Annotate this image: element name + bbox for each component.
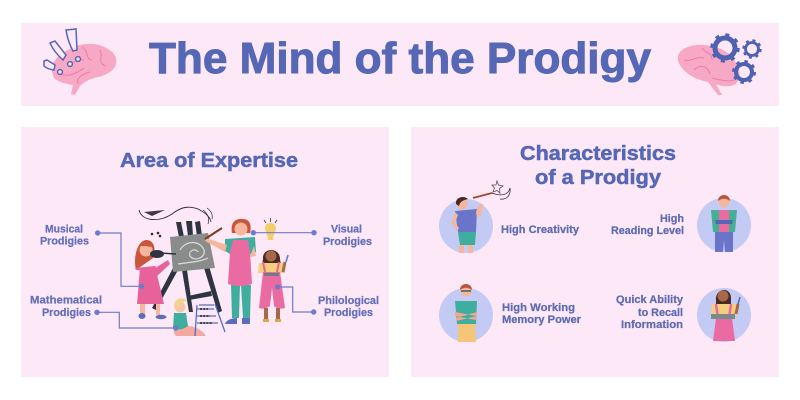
illustration: easel with canvas xyxy=(152,221,222,313)
item: high working memory power: Memory Power xyxy=(502,314,582,326)
label: visual prodigies: Visual xyxy=(331,224,362,236)
item: high creativity xyxy=(439,181,580,253)
label: musical prodigies: Prodigies xyxy=(40,236,89,248)
label: philological prodigies: Prodigies xyxy=(324,307,373,319)
heading: characteristics of a prodigy: of a Prodigy xyxy=(535,167,662,189)
panel: area of expertise xyxy=(21,127,389,377)
illustration: baby with abacus xyxy=(173,298,225,336)
header banner xyxy=(21,23,779,106)
illustration: swirl line and music notes xyxy=(139,207,212,237)
label: philological prodigies: Philological xyxy=(318,295,379,307)
illustration: girl with violin xyxy=(135,240,176,319)
icon: brain with exclamation marks xyxy=(44,29,116,95)
label: musical prodigies xyxy=(40,224,89,248)
item: high working memory power xyxy=(439,284,582,342)
item: high reading level xyxy=(611,195,751,252)
item: quick ability to recall information: to Recall xyxy=(638,307,683,319)
label: musical prodigies: Musical xyxy=(45,224,83,236)
item: quick ability to recall information: Information xyxy=(621,319,683,331)
connector: musical xyxy=(95,230,144,289)
item: high working memory power: High Working xyxy=(502,302,575,314)
label: mathematical prodigies: Prodigies xyxy=(42,307,91,319)
label: mathematical prodigies xyxy=(30,295,102,319)
heading: characteristics of a prodigy: Characteristics xyxy=(520,143,676,165)
item: quick ability to recall information: Quick Ability xyxy=(616,294,684,306)
icon: brain with gears xyxy=(678,35,760,95)
illustration: overalls girl xyxy=(258,250,288,322)
label: visual prodigies xyxy=(323,224,372,248)
heading: area of expertise: Area of Expertise xyxy=(120,150,298,172)
connector: philological xyxy=(275,284,316,315)
label: visual prodigies: Prodigies xyxy=(323,236,372,248)
item: high creativity: High Creativity xyxy=(501,224,580,236)
connector: mathematical xyxy=(94,310,178,331)
item: high reading level: Reading Level xyxy=(611,225,684,237)
connector: visual xyxy=(251,230,317,235)
illustration: painter woman xyxy=(205,219,256,324)
panel: characteristics of a prodigy xyxy=(411,127,779,377)
label: philological prodigies xyxy=(318,295,379,319)
item: quick ability to recall information xyxy=(616,288,751,342)
title: The Mind of the Prodigy xyxy=(149,34,652,83)
label: mathematical prodigies: Mathematical xyxy=(30,295,102,307)
icon: light bulb xyxy=(264,218,277,240)
heading: characteristics of a prodigy xyxy=(520,143,676,189)
item: high reading level: High xyxy=(660,213,684,225)
